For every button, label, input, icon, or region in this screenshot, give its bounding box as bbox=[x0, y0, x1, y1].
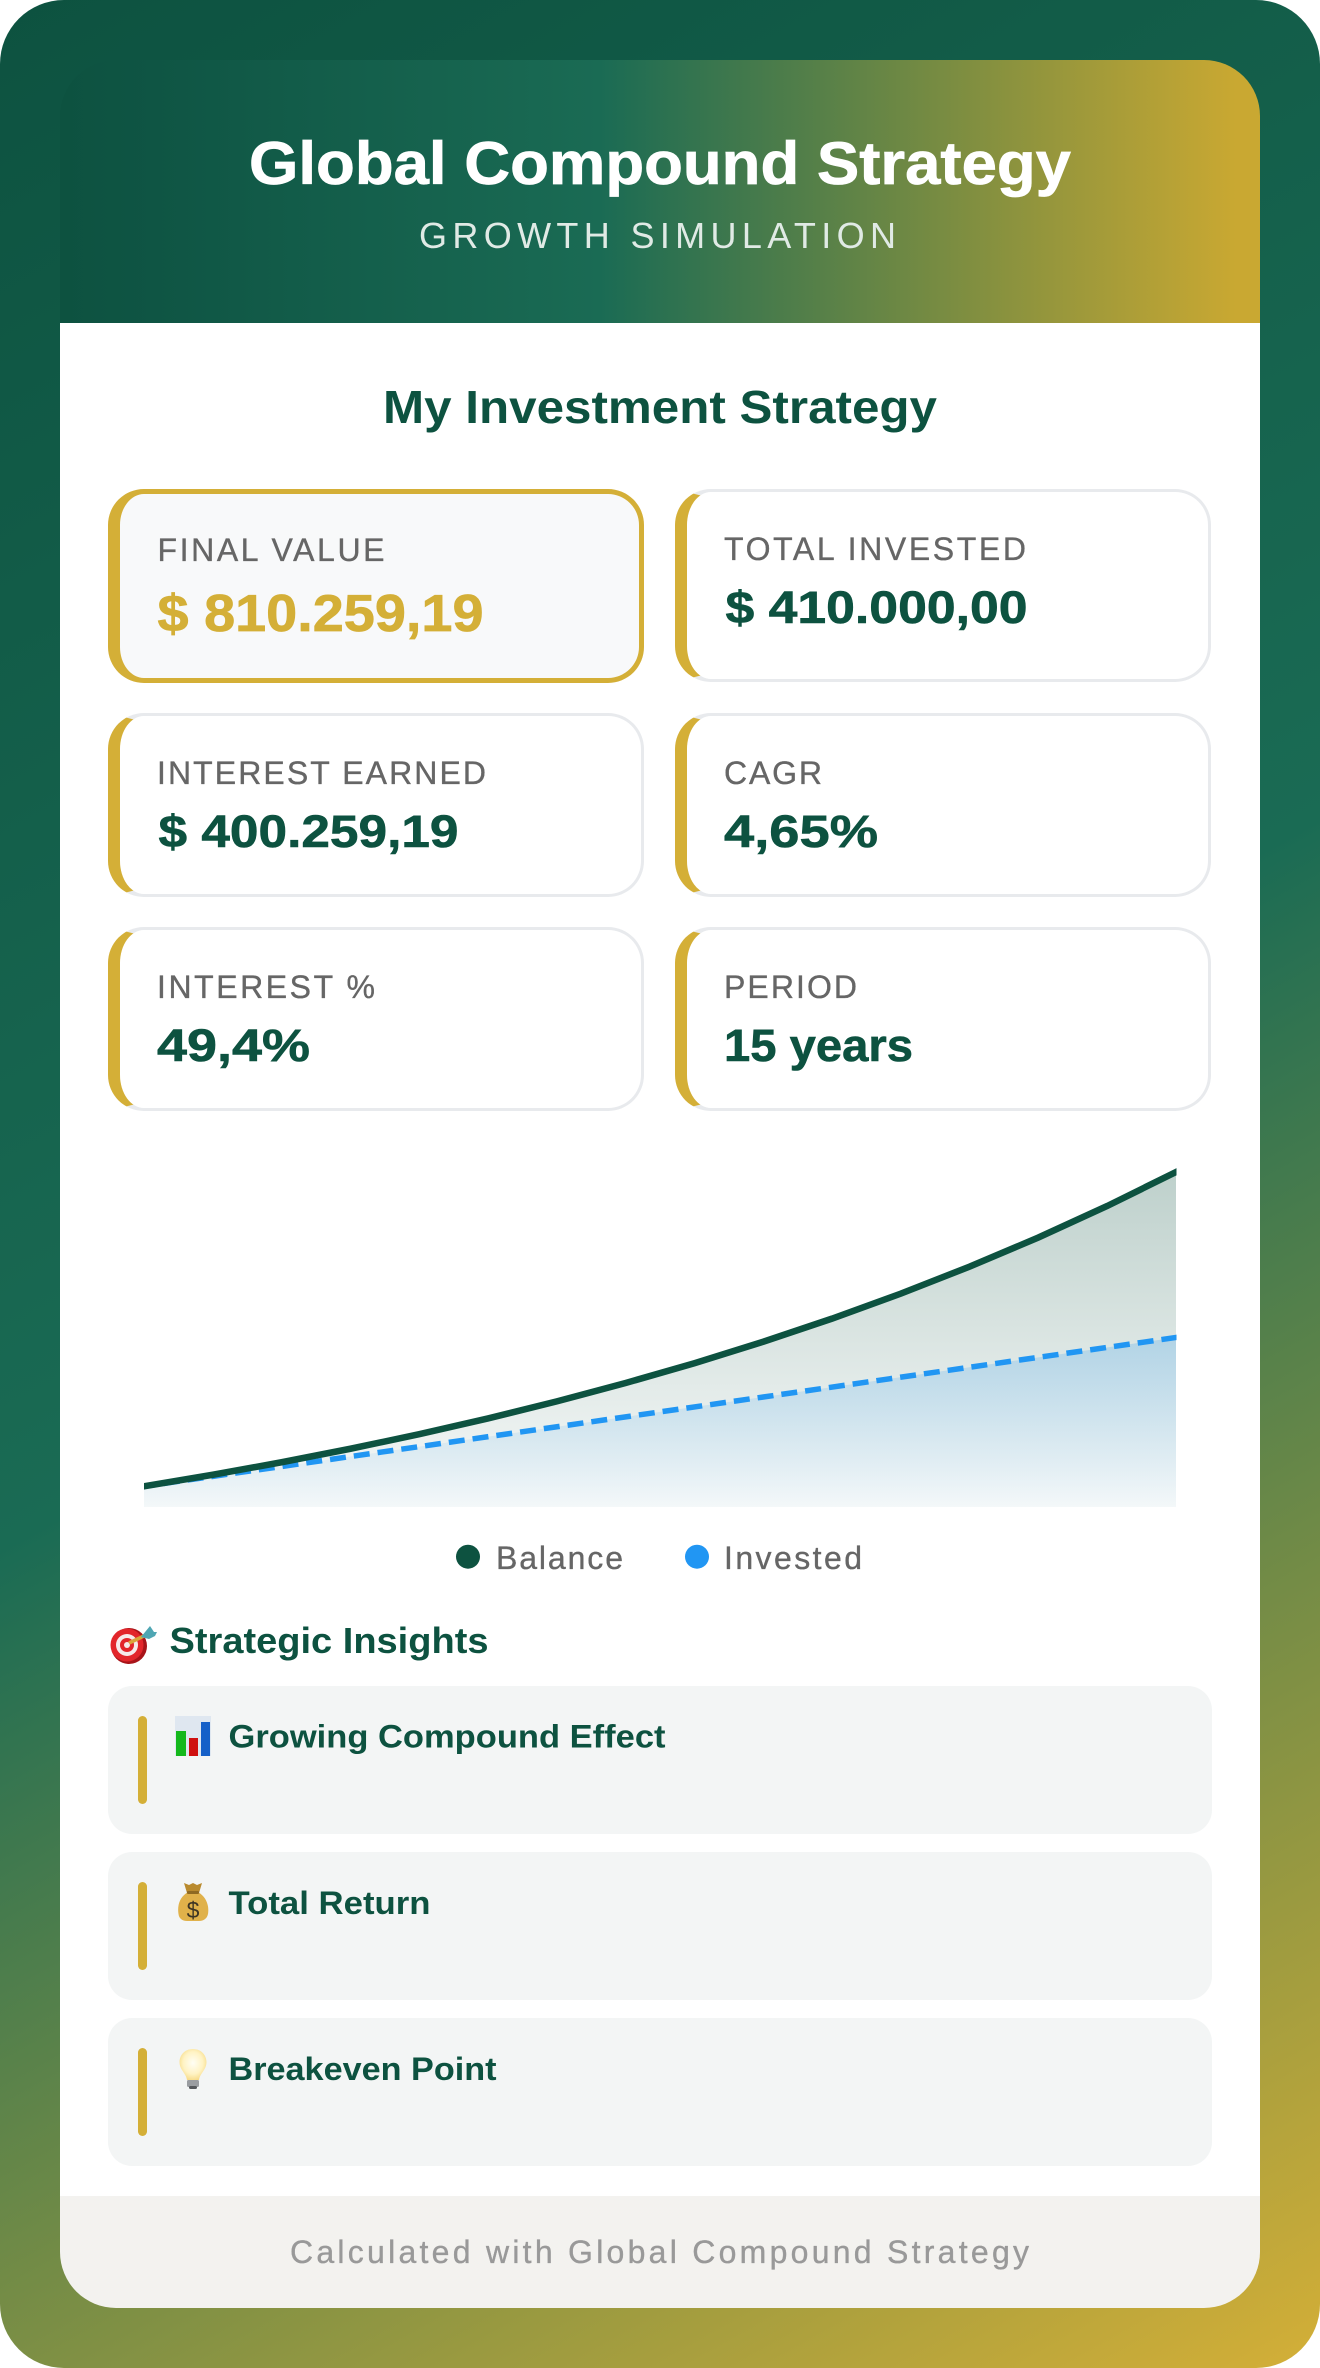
stat card: final value: $ 810.259,19 bbox=[158, 585, 484, 643]
insight card: total return bbox=[108, 1852, 1212, 2000]
stat card: interest earned: INTEREST EARNED bbox=[157, 755, 486, 791]
white content area bbox=[60, 323, 1260, 2196]
icon: money bag: $ bbox=[187, 1897, 200, 1923]
stat card: total invested bbox=[675, 489, 1211, 682]
icon: bar chart bbox=[175, 1716, 211, 1756]
invested dashed line bbox=[140, 1337, 1180, 1487]
icon: light bulb bbox=[180, 2049, 206, 2089]
insight card: growing compound effect bbox=[108, 1686, 1212, 1834]
icon: money bag bbox=[178, 1883, 208, 1923]
balance line bbox=[136, 1168, 1184, 1488]
stat card: interest percent: 49,4% bbox=[157, 1020, 310, 1071]
legend: invested: Invested bbox=[724, 1540, 862, 1576]
line chart and legend bbox=[144, 1168, 1176, 1570]
stat card: CAGR bbox=[675, 713, 1211, 897]
accent bar bbox=[138, 1716, 147, 1804]
insight title: Growing Compound Effect bbox=[228, 1718, 666, 1754]
title: Global Compound Strategy bbox=[249, 130, 1072, 197]
stat card: interest percent bbox=[108, 927, 644, 1111]
accent bar bbox=[138, 2048, 147, 2136]
insight title: Breakeven Point bbox=[228, 2051, 497, 2087]
footer band bbox=[60, 2196, 1260, 2308]
stat card: CAGR: CAGR bbox=[724, 755, 822, 791]
legend: balance: Balance bbox=[496, 1540, 623, 1576]
stat card: total invested: $ 410.000,00 bbox=[726, 582, 1028, 633]
insight title: Total Return bbox=[228, 1885, 430, 1921]
section title: Strategic Insights bbox=[170, 1620, 488, 1661]
invested area bbox=[144, 1340, 1176, 1492]
accent bar bbox=[138, 1882, 147, 1970]
strategy heading: My Investment Strategy bbox=[383, 381, 937, 433]
insight card: breakeven point bbox=[108, 2018, 1212, 2166]
icon: dart target bbox=[110, 1626, 157, 1664]
stat card: final value: FINAL VALUE bbox=[158, 532, 384, 568]
stat card: period: PERIOD bbox=[724, 969, 857, 1005]
stat card: period bbox=[675, 927, 1211, 1111]
stat card: final value bbox=[108, 489, 644, 683]
stat card: period: 15 years bbox=[724, 1020, 913, 1071]
footer text: Calculated with Global Compound Strategy bbox=[290, 2234, 1029, 2270]
stat card: interest percent: INTEREST % bbox=[157, 969, 375, 1005]
stat card: interest earned: $ 400.259,19 bbox=[158, 806, 458, 857]
stat card: CAGR: 4,65% bbox=[724, 806, 878, 857]
stat card: interest earned bbox=[108, 713, 644, 897]
stat card: total invested: TOTAL INVESTED bbox=[724, 531, 1026, 567]
subtitle: GROWTH SIMULATION bbox=[419, 215, 896, 256]
balance area bbox=[144, 1172, 1176, 1507]
header band bbox=[60, 60, 1260, 323]
